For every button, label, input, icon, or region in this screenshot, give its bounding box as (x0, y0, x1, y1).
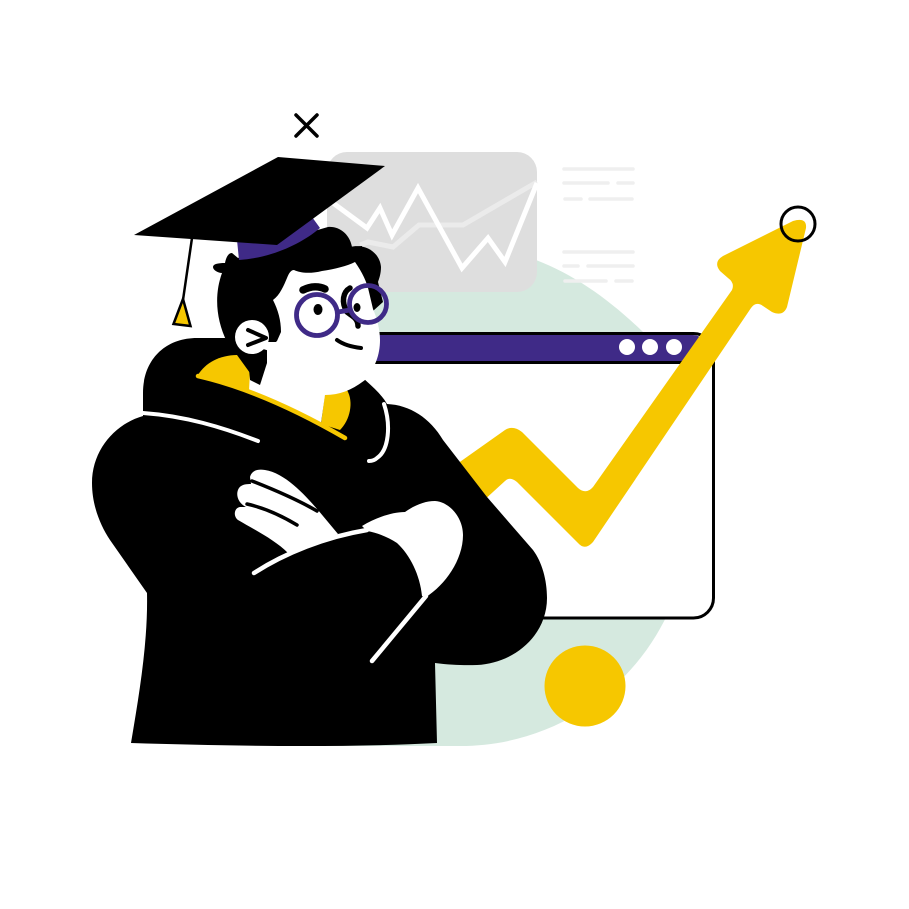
ear (235, 320, 269, 354)
cap band (237, 217, 320, 260)
hair top right lobe (350, 246, 383, 311)
browser window (340, 334, 714, 618)
yellow collar stripe (198, 376, 345, 438)
hood lining yellow (198, 355, 250, 390)
window control dots (619, 339, 682, 355)
cross mark (296, 115, 317, 136)
yellow rising arrow (440, 220, 806, 547)
right hand (362, 501, 463, 597)
faded text lines (564, 169, 633, 281)
target ring (781, 207, 815, 241)
graduate figure (92, 157, 547, 746)
tassel (174, 299, 190, 326)
sleeve lines (254, 530, 426, 661)
hair (213, 227, 362, 342)
mouth (337, 340, 361, 348)
window title bar (340, 335, 706, 361)
cap board (134, 157, 385, 245)
gown white details (143, 404, 388, 461)
eyebrows and nose (303, 287, 358, 326)
tassel cord (183, 238, 192, 300)
face (249, 262, 380, 423)
faded chart panel (327, 152, 537, 292)
background green blob (300, 251, 692, 746)
yellow circle (544, 646, 626, 726)
neck hair tail (248, 355, 267, 385)
left hand (235, 470, 338, 553)
gown body (92, 338, 547, 746)
glasses (296, 286, 386, 336)
collar right yellow (321, 390, 351, 430)
eyes (314, 303, 360, 315)
